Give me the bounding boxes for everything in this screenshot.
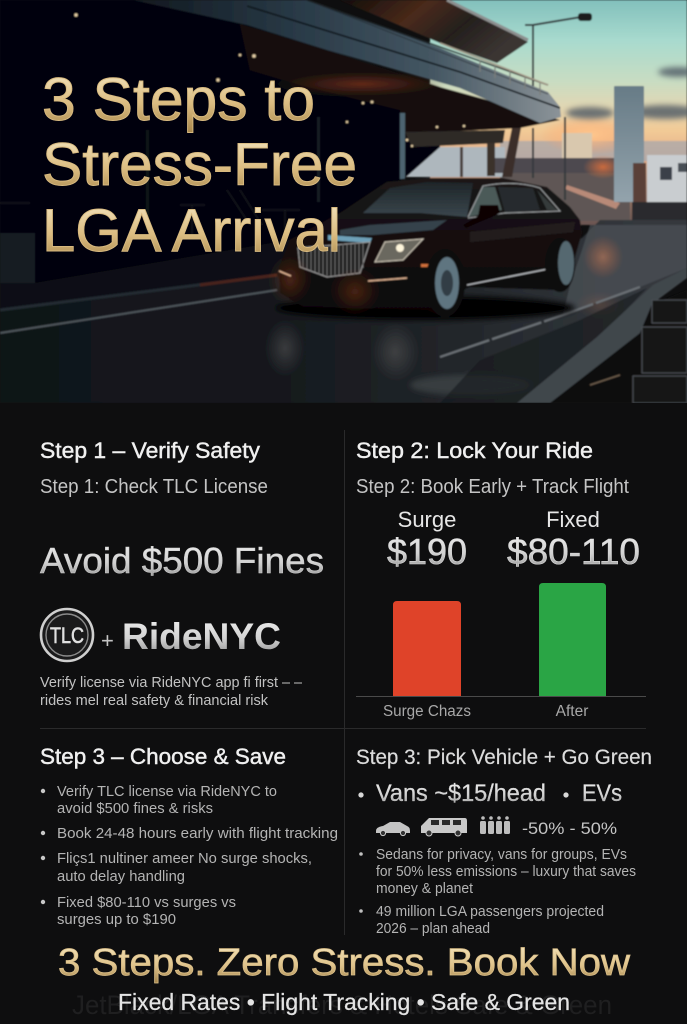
bar chart xyxy=(356,583,646,720)
step 1 note: rides mel real safety & financial risk xyxy=(40,692,268,709)
curb shadow wedge xyxy=(440,288,647,403)
distant dome building xyxy=(562,133,592,159)
vehicle notes xyxy=(359,847,636,937)
footer benefits line: Fixed Rates • Flight Tracking • Safe & Green xyxy=(118,989,570,1015)
step 1 subheading: Step 1: Check TLC License xyxy=(40,476,268,498)
windshield xyxy=(363,182,473,217)
fixed price: $80-110 xyxy=(507,531,640,572)
vans price line xyxy=(358,780,622,807)
lower city block xyxy=(500,173,630,221)
title: 3 Steps to xyxy=(42,66,315,133)
bullet list: Fliçs1 nultiner ameer No surge shocks, xyxy=(57,851,312,867)
panel: step 2 lock your ride xyxy=(356,438,646,720)
emissions savings: -50% - 50% xyxy=(522,819,617,838)
title: Stress-Free xyxy=(42,131,357,198)
front wheel xyxy=(425,249,465,317)
bar label after: After xyxy=(556,703,588,720)
fine callout: Avoid $500 Fines xyxy=(40,540,324,581)
far skyline haze xyxy=(500,141,687,161)
title: LGA Arrival xyxy=(42,197,341,264)
wet road sheen at right xyxy=(265,225,687,395)
left planter xyxy=(0,233,35,283)
panel: step 1 verify safety xyxy=(40,438,324,709)
step 1 note xyxy=(40,674,303,709)
pale buildings behind shelter xyxy=(405,147,505,177)
lane line right xyxy=(440,287,640,357)
bullet list: auto delay handling xyxy=(57,869,185,885)
sky xyxy=(430,0,687,225)
upper deck xyxy=(340,0,528,63)
grille xyxy=(298,242,370,277)
axis xyxy=(356,696,646,698)
lamp head xyxy=(578,13,592,21)
step 2 subheading: Step 2: Book Early + Track Flight xyxy=(356,476,629,498)
bullet list: surges up to $190 xyxy=(57,912,176,928)
RideNYC wordmark: RideNYC xyxy=(122,616,281,657)
icon: TLC badge xyxy=(41,609,93,661)
bullet list: Verify TLC license via RideNYC to xyxy=(57,784,277,800)
sun glow xyxy=(550,120,614,152)
right step 3 heading: Step 3: Pick Vehicle + Go Green xyxy=(356,746,652,769)
grille bar xyxy=(328,235,372,243)
window chrome xyxy=(468,183,560,218)
icon: sedan xyxy=(376,822,410,836)
curb glow xyxy=(200,275,277,285)
icon: group of people xyxy=(480,816,510,834)
footer call to action: 3 Steps. Zero Stress. Book Now xyxy=(58,942,631,984)
mirror xyxy=(463,205,500,228)
title xyxy=(42,66,357,264)
front lamps and flares xyxy=(268,254,430,316)
panel dividers xyxy=(40,430,646,935)
car body xyxy=(279,178,582,317)
side chrome strip xyxy=(467,268,553,285)
vehicle notes: money & planet xyxy=(376,881,473,897)
right building xyxy=(633,155,687,203)
side window mid xyxy=(498,187,540,213)
terminal dark mass xyxy=(0,0,440,310)
rear wheel xyxy=(545,238,575,292)
soffit copper glow xyxy=(277,71,447,97)
vehicle notes: Sedans for privacy, vans for groups, EVs xyxy=(376,847,627,863)
road xyxy=(0,220,687,403)
step 1 note: Verify license via RideNYC app fi first – – xyxy=(40,674,303,691)
band shadow line xyxy=(247,6,560,108)
curb highlight xyxy=(0,275,277,310)
limousine xyxy=(268,178,582,320)
car shadow xyxy=(275,296,575,320)
tower xyxy=(614,86,644,202)
ceiling lights xyxy=(74,13,465,147)
headlight xyxy=(375,239,423,262)
pedestrian bridge xyxy=(495,158,615,173)
bullet list xyxy=(41,784,338,928)
door sheen xyxy=(470,222,575,242)
icon: van xyxy=(421,818,467,836)
left step 3 heading: Step 3 – Choose & Save xyxy=(40,744,286,769)
side window front xyxy=(468,187,502,217)
vehicle notes: 49 million LGA passengers projected xyxy=(376,904,604,920)
upper deck rim xyxy=(447,0,528,40)
icon: TLC badge: TLC xyxy=(50,623,84,648)
red surge bar xyxy=(393,601,461,696)
bullet list: Book 24-48 hours early with flight tracking xyxy=(57,826,338,842)
terrace furniture xyxy=(0,190,300,234)
vans price line: Vans ~$15/head xyxy=(376,780,546,807)
panel: step 3 choose and save xyxy=(40,744,338,928)
plus sign: + xyxy=(101,628,114,653)
clouds xyxy=(566,67,687,119)
hood sheen xyxy=(340,220,447,235)
right curb and barriers xyxy=(517,268,687,403)
light streak xyxy=(565,185,620,209)
vehicle notes: 2026 – plan ahead xyxy=(376,921,490,937)
surge label: Surge xyxy=(398,507,456,532)
support columns xyxy=(146,113,521,230)
headlight beam xyxy=(396,244,404,252)
hero photo: limousine at LGA terminal xyxy=(0,0,687,403)
bridge glow xyxy=(584,156,614,178)
panel: step 3 pick vehicle xyxy=(356,746,652,937)
parked truck xyxy=(632,202,687,224)
step 2 heading: Step 2: Lock Your Ride xyxy=(356,438,593,463)
vehicle notes: for 50% less emissions – luxury that saves xyxy=(376,864,636,880)
lane line left xyxy=(0,290,277,333)
bar label surge: Surge Chazs xyxy=(383,703,471,720)
lower canopy xyxy=(405,130,505,147)
step 1 heading: Step 1 – Verify Safety xyxy=(40,438,260,463)
footer ghost text: JetBlack/LGA Transfers & Hotels Safe & Green xyxy=(72,990,612,1020)
street lamp xyxy=(525,17,581,200)
sidewalk xyxy=(0,240,290,310)
bullet list: Fixed $80-110 vs surges vs xyxy=(57,895,236,911)
railing xyxy=(307,0,548,95)
soffit xyxy=(240,24,560,140)
fixed label: Fixed xyxy=(546,507,600,532)
side window rear xyxy=(537,190,557,210)
green fixed bar xyxy=(539,583,606,696)
canopy band xyxy=(133,0,561,123)
vans price line: EVs xyxy=(582,780,622,807)
surge price: $190 xyxy=(387,531,467,572)
bullet list: avoid $500 fines & risks xyxy=(57,801,213,817)
